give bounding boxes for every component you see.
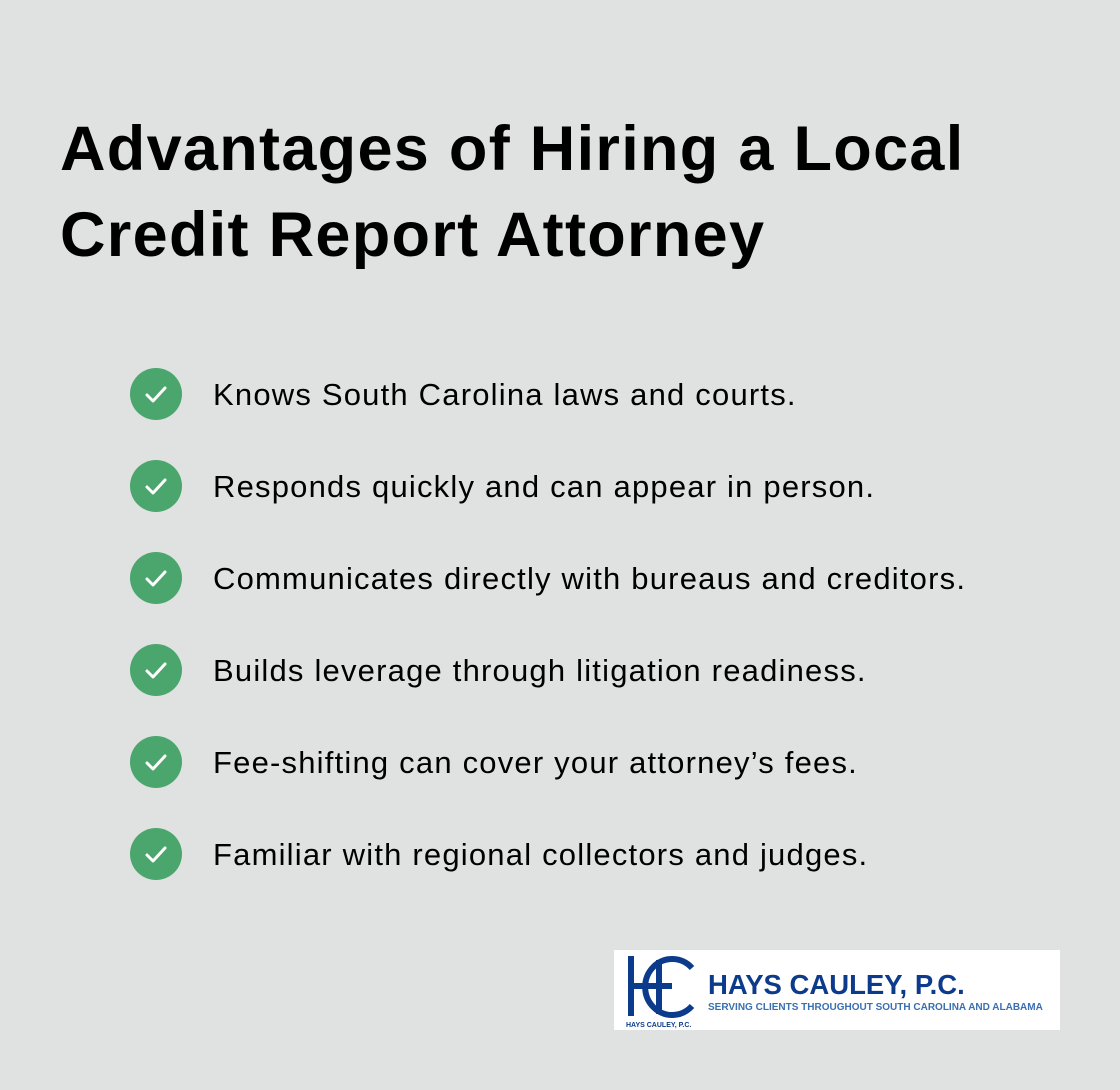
list item 4 [130, 644, 867, 696]
logo: SERVING CLIENTS THROUGHOUT SOUTH CAROLINA AND ALABAMA [708, 1002, 1043, 1013]
list item 3: Communicates directly with bureaus and creditors. [213, 561, 966, 596]
icon: HC monogram [631, 956, 692, 1016]
title: Advantages of Hiring a Local [60, 114, 965, 184]
list item 5: Fee-shifting can cover your attorney’s fees. [213, 745, 858, 780]
list item 6: Familiar with regional collectors and judges. [213, 837, 868, 872]
title [60, 114, 965, 270]
list item 2 [130, 460, 875, 512]
list item 1: Knows South Carolina laws and courts. [213, 377, 797, 412]
title: Credit Report Attorney [60, 200, 765, 270]
list item 6 [130, 828, 868, 880]
list item 4: Builds leverage through litigation readiness. [213, 653, 867, 688]
list item 3 [130, 552, 966, 604]
list item 2: Responds quickly and can appear in person. [213, 469, 875, 504]
list item 1 [130, 368, 797, 420]
logo [614, 950, 1060, 1030]
list item 5 [130, 736, 858, 788]
logo: HAYS CAULEY, P.C. [626, 1022, 691, 1029]
logo: HAYS CAULEY, P.C. [708, 969, 965, 1000]
